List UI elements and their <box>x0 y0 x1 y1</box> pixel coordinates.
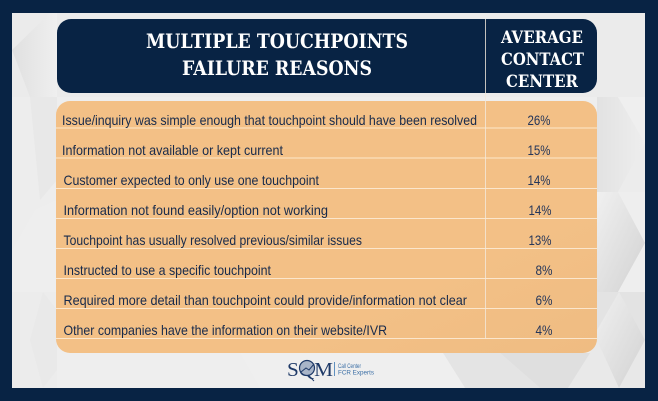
row 6: Instructed to use a specific touchpoint <box>64 262 271 278</box>
heading: average contact center column: CONTACT <box>501 50 584 70</box>
row 6 <box>64 262 552 278</box>
logo: SQM call center FCR experts: FCR Experts <box>338 370 375 376</box>
row 8: 4% <box>536 322 552 338</box>
row 7: 6% <box>536 292 552 308</box>
row 3 <box>64 172 550 188</box>
heading: average contact center column <box>500 28 584 92</box>
heading: table title: MULTIPLE TOUCHPOINTS <box>146 29 408 53</box>
row 5: Touchpoint has usually resolved previous/similar issues <box>64 232 362 248</box>
row 4 <box>64 202 552 218</box>
row 2: Information not available or kept current <box>62 142 283 158</box>
icon: globe in Q <box>300 360 314 381</box>
heading: average contact center column: CENTER <box>506 72 579 92</box>
row 2: 15% <box>528 142 550 158</box>
row 3: 14% <box>528 172 550 188</box>
heading: table title: FAILURE REASONS <box>182 56 372 80</box>
row 4: 14% <box>528 202 552 218</box>
logo: SQM call center FCR experts: Call Center <box>338 363 362 370</box>
logo: SQM call center FCR experts: SQM <box>287 359 333 381</box>
heading: average contact center column: AVERAGE <box>500 28 583 48</box>
heading: table title <box>146 29 408 80</box>
panel: orange table <box>56 19 597 353</box>
row 3: Customer expected to only use one touchpoint <box>64 172 319 188</box>
row 4: Information not found easily/option not working <box>64 202 328 218</box>
row 7: Required more detail than touchpoint could provide/information not clear <box>64 292 467 308</box>
row 6: 8% <box>536 262 552 278</box>
logo: SQM call center FCR experts <box>287 359 375 381</box>
row 2 <box>62 142 550 158</box>
row 1: 26% <box>528 112 550 128</box>
row 8: Other companies have the information on their website/IVR <box>64 322 387 338</box>
row 5: 13% <box>528 232 552 248</box>
header bar <box>57 19 597 93</box>
row 1: Issue/inquiry was simple enough that touchpoint should have been resolved <box>62 112 477 128</box>
